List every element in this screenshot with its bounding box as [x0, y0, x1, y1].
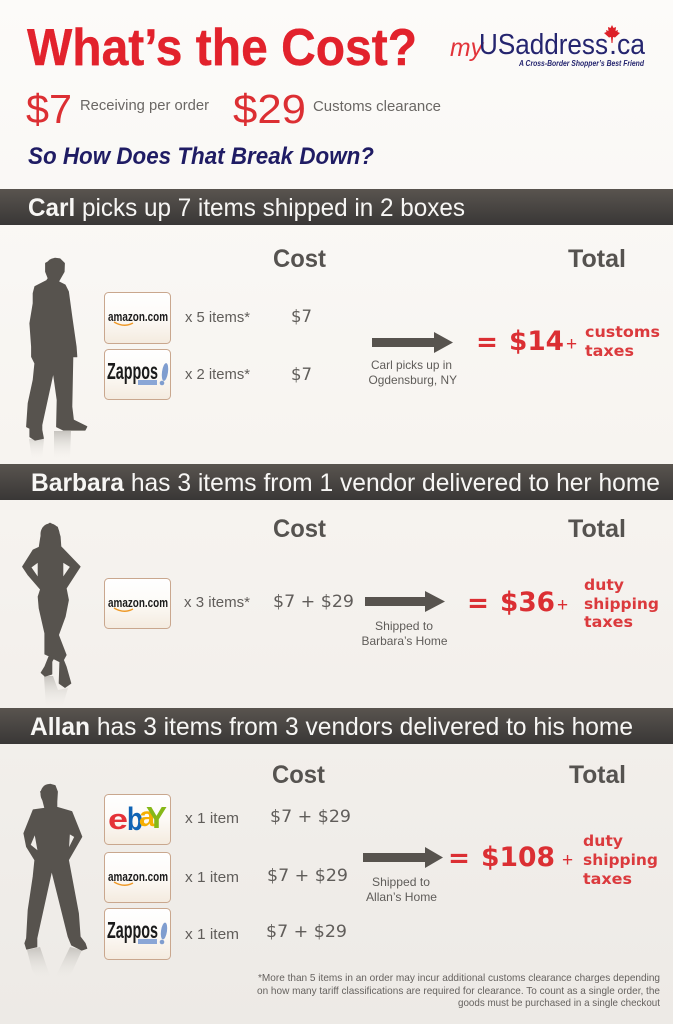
figure: Allan silhouette	[24, 784, 87, 982]
logo: amazon	[104, 292, 170, 344]
column head: Cost: Cost	[273, 515, 327, 543]
footnote: *More than 5 items in an order may incur additional customs clearance charges depending	[258, 972, 660, 984]
fee: $29 customs: $29	[233, 86, 306, 132]
banner: Carl: Carl picks up 7 items shipped in 2 boxes	[28, 194, 465, 222]
column head: Total: Total	[568, 515, 626, 543]
logo: amazon	[104, 578, 170, 628]
logo: myUSaddress.ca: ca	[617, 29, 646, 61]
banner: Barbara: Barbara has 3 items from 1 vendor delivered to her home	[31, 469, 660, 497]
fee: $29 customs: Customs clearance	[313, 99, 441, 115]
column head: Cost: Cost	[273, 245, 327, 273]
total: $108: shipping	[583, 851, 658, 869]
total: $14	[476, 323, 660, 360]
price: $7: $7	[291, 365, 312, 385]
fee: $7 receiving	[26, 86, 209, 132]
icon: maple leaf	[604, 25, 620, 43]
total: $108: $108	[481, 842, 555, 873]
logo: ebay: e	[108, 804, 128, 836]
subtitle: So How Does That Break Down?	[28, 143, 374, 170]
logo: amazon	[104, 852, 170, 902]
row: 2 items: x 2 items*	[185, 366, 250, 383]
logo: amazon: amazon.com	[108, 310, 168, 324]
row: ebay item: x 1 item	[185, 810, 239, 827]
logo: myUSaddress.ca	[450, 25, 646, 68]
banner: Carl	[0, 189, 673, 225]
caption: pickup: Ogdensburg, NY	[368, 373, 457, 387]
row: 3 items: x 3 items*	[184, 594, 250, 611]
logo: myUSaddress.ca: .	[609, 29, 617, 61]
footnote: on how many tariff classifications are required for clearance. To count as a single order, the	[257, 985, 660, 997]
total: $36: taxes	[584, 613, 633, 631]
total: $108: taxes	[583, 870, 632, 888]
caption: shipped to Barbara: Barbara’s Home	[362, 634, 448, 648]
column head: Total: Total	[569, 761, 626, 789]
price: ebay: $7 + $29	[270, 807, 351, 827]
logo: ebay: b	[127, 801, 143, 837]
logo: zappos: Zappos	[107, 917, 158, 943]
logo: amazon: amazon.com	[108, 596, 168, 610]
logo: ebay: Y	[146, 800, 167, 835]
caption: shipped to Allan	[366, 875, 437, 904]
arrow: pickup	[372, 332, 453, 353]
row: 5 items: x 5 items*	[185, 309, 250, 326]
arrow: shipped to Barbara	[365, 591, 445, 612]
total: $36: shipping	[584, 595, 659, 613]
total: $14: =	[476, 327, 498, 358]
total: $14: customs	[585, 323, 660, 341]
logo: myUSaddress.ca: USaddress	[479, 29, 608, 61]
total: $108: =	[448, 843, 470, 874]
total: $36: duty	[584, 576, 624, 594]
caption: shipped to Barbara	[362, 619, 448, 648]
price: zappos: $7 + $29	[266, 922, 347, 942]
panel: Barbara	[0, 464, 673, 708]
row: zappos item: x 1 item	[185, 926, 239, 943]
total: $108	[448, 832, 658, 888]
caption: pickup	[368, 358, 457, 387]
total: $108: duty	[583, 832, 623, 850]
logo: zappos	[104, 350, 170, 400]
caption: shipped to Allan: Allan’s Home	[366, 890, 437, 904]
price: $7 + $29: $7 + $29	[273, 592, 354, 612]
caption: pickup: Carl picks up in	[371, 358, 452, 372]
column head: Total: Total	[568, 245, 626, 273]
footnote: goods must be purchased in a single checkout	[458, 997, 660, 1009]
total: $14: +	[566, 334, 577, 355]
total: $36: =	[467, 588, 489, 619]
row: amazon item: x 1 item	[185, 869, 239, 886]
panel: Carl	[0, 189, 673, 460]
price: amazon: $7 + $29	[267, 866, 348, 886]
logo: zappos	[104, 908, 170, 960]
price: $7: $7	[291, 307, 312, 327]
fee: $7 receiving: Receiving per order	[80, 98, 209, 114]
total: $36: $36	[500, 587, 555, 618]
total: $108: +	[562, 850, 573, 871]
logo: zappos: Zappos	[107, 358, 158, 384]
banner: Allan: Allan has 3 items from 3 vendors delivered to his home	[30, 713, 633, 741]
panel: Allan	[0, 708, 673, 982]
logo: amazon: amazon.com	[108, 870, 168, 884]
logo: myUSaddress.ca: my	[450, 34, 484, 62]
logo: ebay	[104, 794, 170, 844]
title: What’s the Cost?	[27, 19, 417, 77]
fee: $7 receiving: $7	[26, 86, 72, 132]
total: $14: taxes	[585, 342, 634, 360]
fee: $29 customs	[233, 86, 441, 132]
logo: ebay: a	[139, 801, 155, 832]
total: $36	[467, 576, 659, 631]
total: $14: $14	[509, 326, 564, 357]
figure: Barbara silhouette	[23, 523, 80, 708]
caption: shipped to Barbara: Shipped to	[375, 619, 433, 633]
logo: myUSaddress.ca: A Cross-Border Shopper’s Best Friend	[518, 58, 645, 68]
caption: shipped to Allan: Shipped to	[372, 875, 430, 889]
figure: Carl silhouette	[27, 258, 87, 460]
footnote	[257, 972, 660, 1009]
total: $36: +	[557, 595, 568, 616]
column head: Cost: Cost	[272, 761, 326, 789]
arrow: shipped to Allan	[363, 847, 443, 868]
